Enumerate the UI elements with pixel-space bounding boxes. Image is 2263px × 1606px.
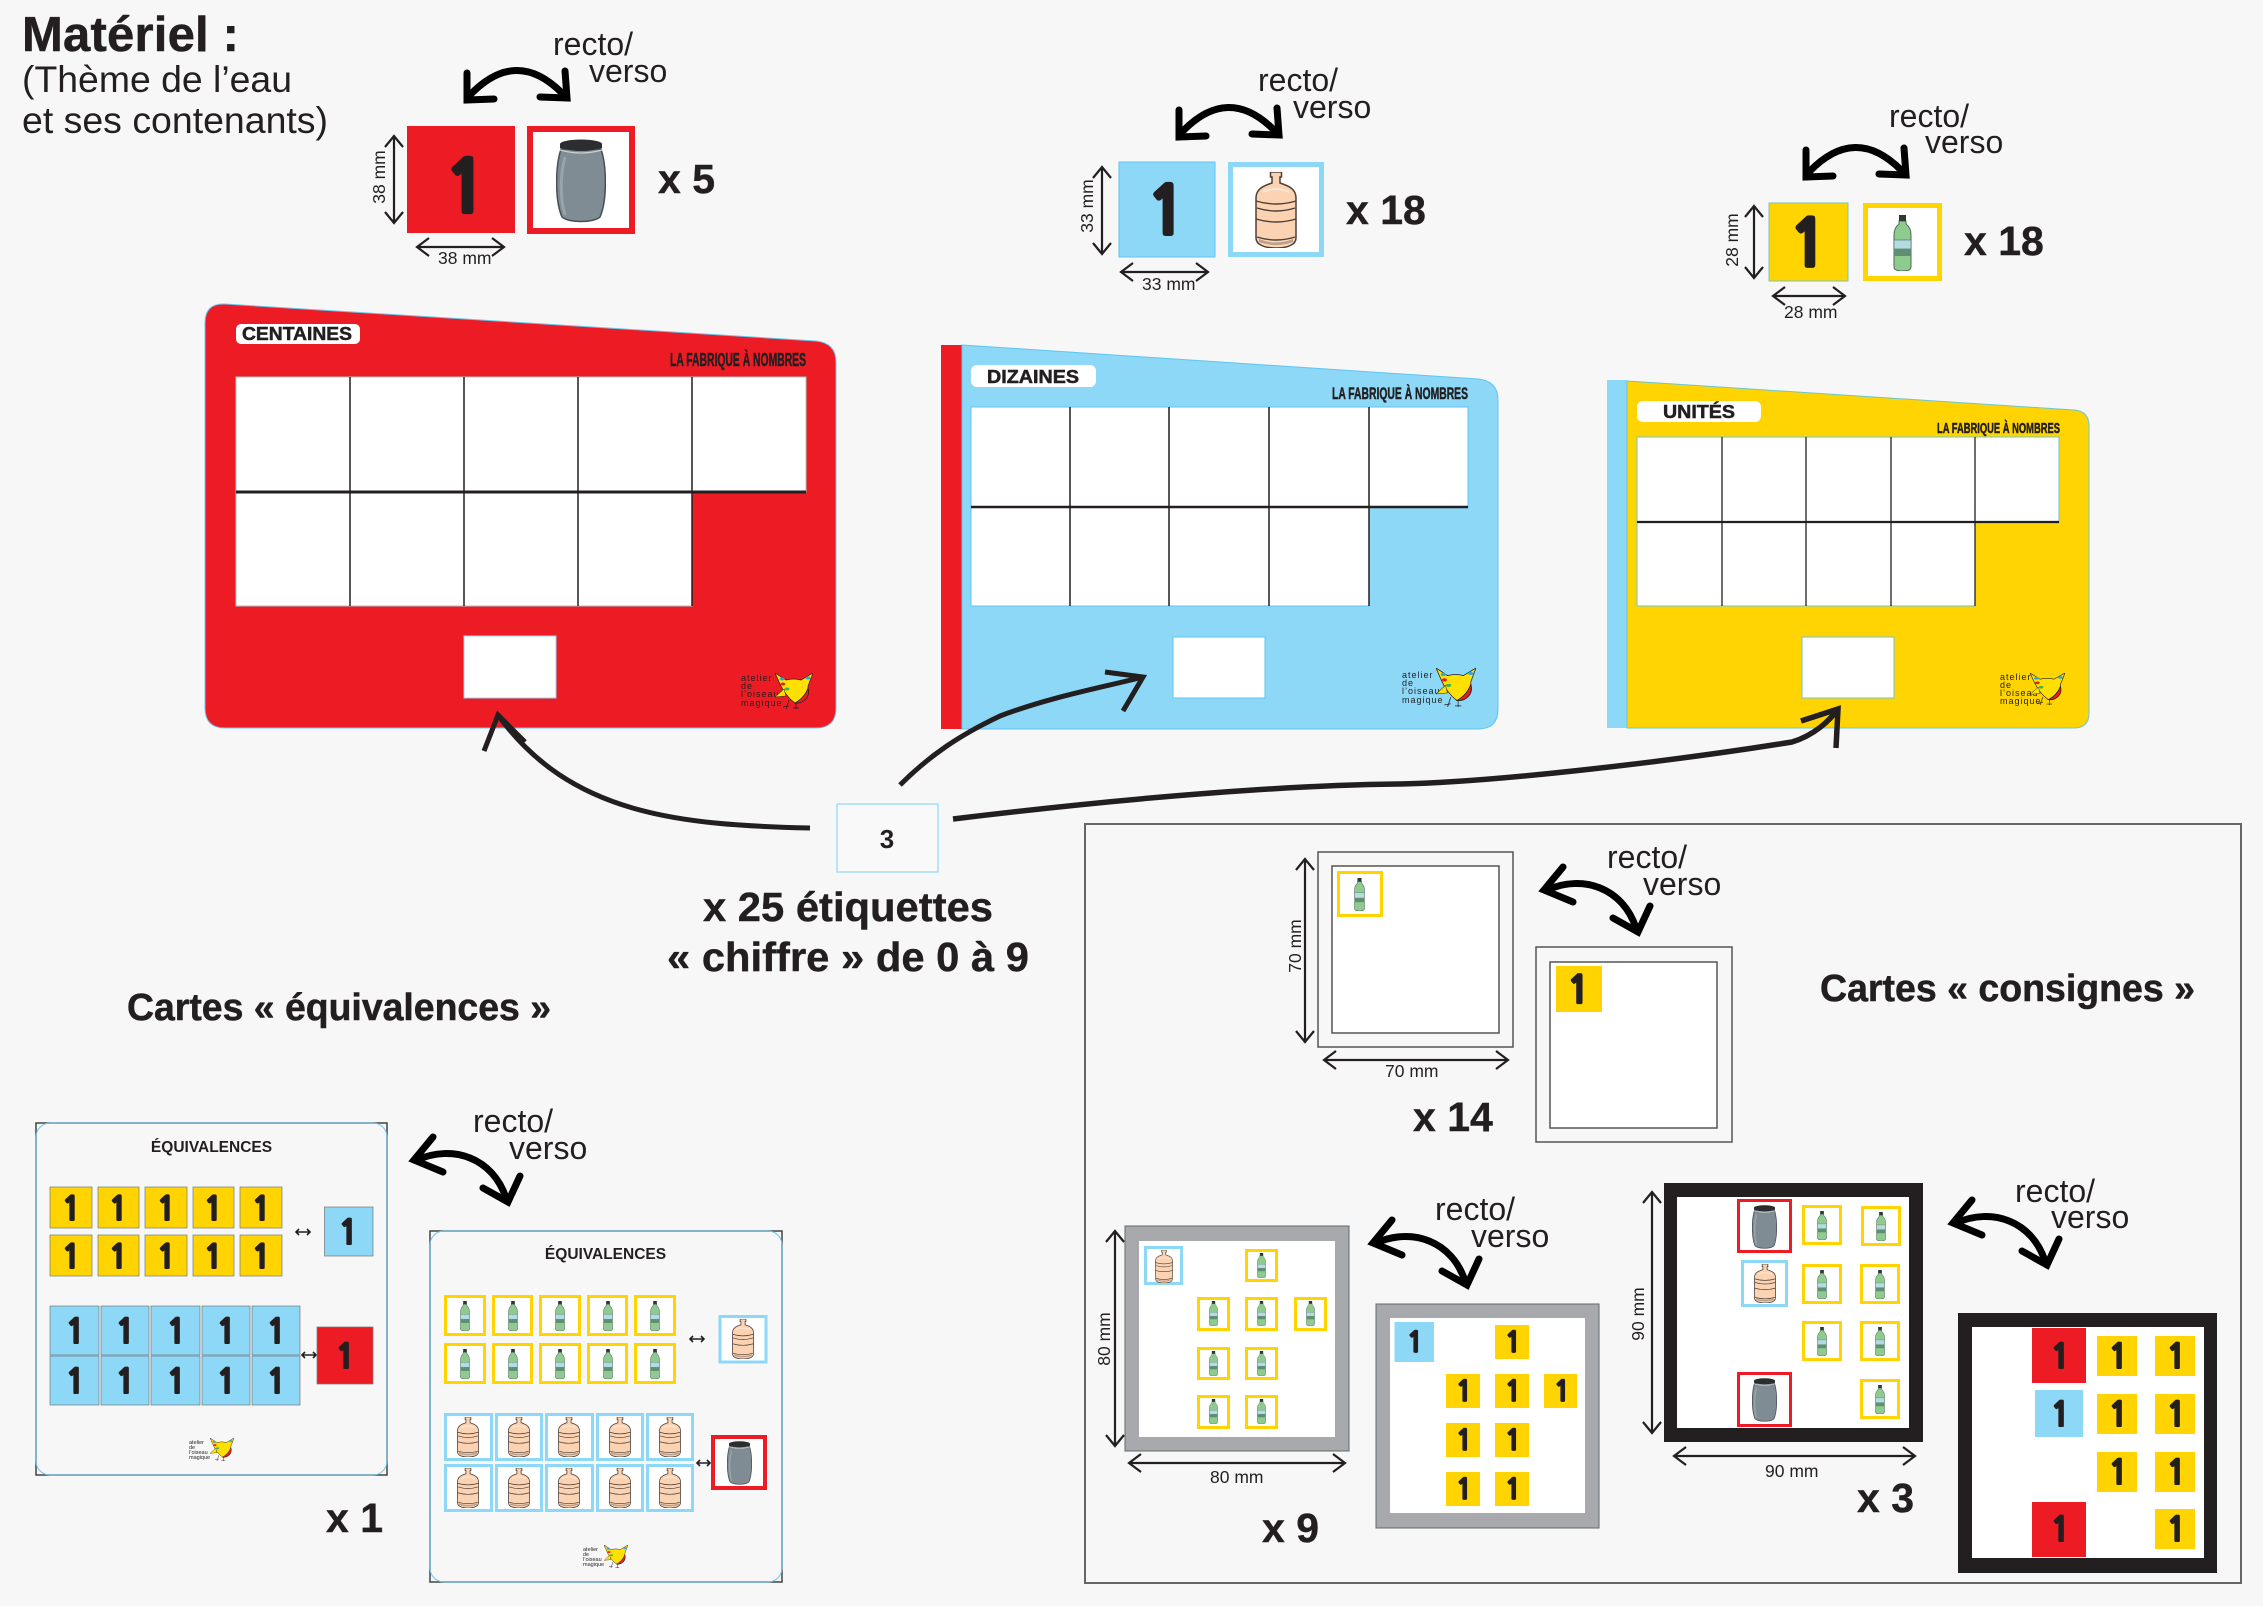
dimension: height — [1722, 206, 1763, 278]
logo: magique — [583, 1562, 604, 1568]
dimension: width — [1674, 1447, 1915, 1481]
ten blue card digits: 1 — [266, 1365, 286, 1398]
barrel single card — [713, 1437, 765, 1488]
card title: ÉQUIVALENCES — [545, 1246, 666, 1263]
quantity: x 14 — [1413, 1094, 1493, 1140]
jug single card — [720, 1316, 766, 1362]
verso card: 1 — [1567, 971, 1590, 1009]
card: equivalence recto — [36, 1123, 387, 1475]
quantity: x 18 — [1964, 218, 2044, 264]
arrow: label to dizaines — [900, 672, 1143, 785]
recto verso label: recto/ — [1607, 839, 1687, 875]
ten frame — [971, 407, 1468, 606]
group: 14 cards — [1285, 839, 1732, 1142]
ten yellow card digits: 1 — [204, 1241, 223, 1273]
digit label sample: 3 — [880, 824, 894, 854]
blue spine — [1607, 380, 1627, 728]
verso card: 1 — [1456, 1378, 1473, 1406]
panel: centaines board — [205, 304, 836, 728]
icon: flip arrow — [1373, 1220, 1479, 1285]
ten blue card digits: 1 — [65, 1315, 85, 1348]
verso card: 1 — [1407, 1329, 1424, 1357]
verso card — [1376, 1304, 1599, 1528]
red single card — [317, 1327, 373, 1384]
panel: cartes consignes — [1085, 824, 2241, 1583]
ten yellow card digits: 1 — [204, 1193, 223, 1225]
icon: flip arrow — [1953, 1200, 2059, 1265]
ten blue card digits: 1 — [216, 1315, 236, 1348]
recto card — [1318, 852, 1513, 1047]
dimension: width: 90 mm — [1765, 1461, 1818, 1481]
label: unites — [1637, 401, 1761, 422]
dimension: width — [1121, 263, 1208, 294]
digit box — [1802, 637, 1894, 698]
card: red recto — [407, 126, 515, 233]
subtitle: (Thème de l’eau — [22, 59, 292, 100]
board shape — [962, 345, 1498, 729]
caption: digit labels: x 25 étiquettes — [703, 884, 993, 930]
verso card: 1 — [2050, 1340, 2070, 1373]
verso card: 1 — [2050, 1513, 2070, 1546]
recto verso label: recto/ — [473, 1103, 553, 1139]
logo — [741, 673, 813, 709]
logo: magique — [1402, 695, 1444, 705]
dimension: width — [1773, 287, 1845, 322]
logo: atelier — [2000, 672, 2032, 682]
dimension: height: 33 mm — [1077, 179, 1097, 233]
ten yellow card digits: 1 — [62, 1241, 81, 1273]
card: equivalence verso — [430, 1231, 782, 1582]
group: unites cards — [1722, 98, 2044, 322]
subtitle — [22, 59, 328, 141]
title: Matériel : — [22, 8, 239, 62]
recto verso label: verso — [1643, 866, 1721, 902]
group: 9 cards — [1094, 1191, 1599, 1551]
dimension: width: 80 mm — [1210, 1467, 1263, 1487]
verso card: 1 — [1505, 1476, 1522, 1504]
quantity: x 9 — [1262, 1505, 1319, 1551]
label: dizaines: DIZAINES — [987, 367, 1079, 387]
verso card: 1 — [2108, 1340, 2128, 1373]
logo: atelier — [583, 1547, 598, 1553]
blue single card — [324, 1207, 373, 1256]
logo: magique — [189, 1455, 210, 1461]
icon: flip arrow — [414, 1137, 520, 1202]
heading: cartes consignes: Cartes « consignes » — [1820, 968, 2195, 1010]
logo: l’oiseau — [2000, 688, 2039, 698]
group: equivalence cards — [36, 1103, 782, 1582]
dimension: width: 38 mm — [438, 248, 491, 268]
red spine — [941, 345, 962, 729]
ten bottle cards — [446, 1296, 674, 1382]
recto verso label: verso — [1925, 124, 2003, 160]
logo: de — [1402, 678, 1414, 688]
heading: cartes equivalences: Cartes « équivalences » — [127, 987, 551, 1029]
ten blue card digits: 1 — [166, 1365, 186, 1398]
dimension: width — [1129, 1454, 1345, 1487]
verso card: 1 — [1554, 1378, 1571, 1406]
group: 3 cards — [1628, 1173, 2217, 1573]
verso card: 1 — [2166, 1456, 2186, 1489]
recto card — [1125, 1226, 1349, 1451]
quantity: x 5 — [658, 156, 715, 202]
verso card: 1 — [1505, 1427, 1522, 1455]
logo — [583, 1545, 628, 1568]
ten frame — [1637, 437, 2059, 606]
label: unites: UNITÉS — [1663, 401, 1735, 422]
board shape — [205, 304, 836, 728]
recto verso label — [2015, 1173, 2129, 1235]
verso card: 1 — [2166, 1340, 2186, 1373]
recto verso label: verso — [2051, 1199, 2129, 1235]
recto verso label: verso — [509, 1130, 587, 1166]
card: red recto: 1 — [444, 152, 487, 223]
board shape — [1627, 381, 2089, 728]
recto verso label: recto/ — [1258, 62, 1338, 98]
digit box — [464, 636, 556, 698]
logo: de — [741, 681, 753, 691]
caption: digit labels — [667, 884, 1029, 980]
dimension: height — [1077, 167, 1111, 254]
digit label sample — [837, 804, 938, 872]
recto verso label: recto/ — [553, 26, 633, 62]
ten yellow card digits: 1 — [62, 1193, 81, 1225]
dimension: height: 38 mm — [369, 150, 389, 204]
ten jug cards — [446, 1414, 692, 1510]
dimension: width — [1324, 1051, 1508, 1081]
recto verso label — [1607, 839, 1721, 902]
dimension: height — [1094, 1231, 1124, 1446]
verso card — [1536, 947, 1732, 1142]
ten blue card digits: 1 — [115, 1315, 135, 1348]
card: barrel verso — [530, 129, 632, 231]
logo: l’oiseau — [189, 1450, 208, 1456]
logo — [189, 1438, 234, 1461]
panel: unites board — [1607, 380, 2089, 728]
recto card — [1664, 1183, 1923, 1442]
logo: atelier — [189, 1440, 204, 1446]
dimension: width — [417, 238, 504, 268]
verso card: 1 — [2108, 1398, 2128, 1431]
quantity: x 1 — [326, 1495, 383, 1541]
icon: small arrow — [697, 1460, 710, 1466]
blue single card: 1 — [338, 1216, 358, 1249]
icon: flip arrow — [1544, 867, 1650, 932]
recto verso label: recto/ — [1435, 1191, 1515, 1227]
verso card — [1958, 1313, 2217, 1573]
dimension: width: 70 mm — [1385, 1061, 1438, 1081]
dimension: height: 28 mm — [1722, 213, 1742, 267]
ten yellow card digits: 1 — [109, 1193, 128, 1225]
card: yellow recto — [1769, 203, 1848, 281]
card: blue recto: 1 — [1147, 178, 1187, 244]
logo — [2000, 672, 2065, 706]
icon: flip arrow — [467, 70, 567, 100]
ten yellow card digits: 1 — [157, 1193, 176, 1225]
ten yellow card digits: 1 — [252, 1241, 271, 1273]
ten blue card digits: 1 — [266, 1315, 286, 1348]
ten blue card digits: 1 — [166, 1315, 186, 1348]
verso card: 1 — [2166, 1398, 2186, 1431]
recto verso label: verso — [589, 53, 667, 89]
dimension: height: 70 mm — [1285, 919, 1305, 973]
dimension: height — [1285, 859, 1314, 1042]
verso card: 1 — [2166, 1513, 2186, 1546]
recto verso label: verso — [1293, 89, 1371, 125]
quantity: x 3 — [1857, 1475, 1914, 1521]
icon: flip arrow — [1806, 147, 1906, 177]
dimension: height: 80 mm — [1094, 1312, 1114, 1366]
logo: l’oiseau — [741, 689, 780, 699]
verso card: 1 — [1456, 1427, 1473, 1455]
ten blue cards — [50, 1306, 300, 1405]
icon: small arrow — [296, 1229, 310, 1235]
ten yellow card digits: 1 — [157, 1241, 176, 1273]
logo: atelier — [741, 673, 773, 683]
dimension: width: 28 mm — [1784, 302, 1837, 322]
icon: small arrow — [302, 1352, 316, 1358]
card title: ÉQUIVALENCES — [151, 1139, 272, 1156]
arrow: label to centaines — [484, 715, 810, 828]
logo: magique — [2000, 696, 2042, 706]
brand title: LA FABRIQUE À NOMBRES — [1937, 420, 2060, 437]
recto verso label — [1889, 98, 2003, 160]
icon: small arrow — [690, 1336, 704, 1342]
recto verso label — [553, 26, 667, 89]
card: bottle verso — [1866, 206, 1940, 278]
digit box — [1173, 637, 1265, 698]
ten blue card digits: 1 — [65, 1365, 85, 1398]
logo: de — [189, 1445, 195, 1451]
recto verso label: recto/ — [2015, 1173, 2095, 1209]
recto verso label — [1435, 1191, 1549, 1254]
dimension: height: 90 mm — [1628, 1287, 1648, 1341]
verso card: 1 — [1456, 1476, 1473, 1504]
verso card: 1 — [1505, 1378, 1522, 1406]
dimension: height — [1628, 1192, 1661, 1433]
ten yellow card digits: 1 — [109, 1241, 128, 1273]
red single card: 1 — [335, 1340, 355, 1373]
logo — [1402, 668, 1476, 707]
brand title: LA FABRIQUE À NOMBRES — [670, 349, 806, 370]
verso card: 1 — [2108, 1456, 2128, 1489]
logo: de — [2000, 680, 2012, 690]
label: centaines: CENTAINES — [242, 323, 352, 344]
verso card: 1 — [1505, 1329, 1522, 1357]
panel: dizaines board — [941, 345, 1498, 729]
panel frame — [1085, 824, 2241, 1583]
ten blue card digits: 1 — [115, 1365, 135, 1398]
ten yellow card digits — [62, 1193, 271, 1273]
icon: flip arrow — [1179, 107, 1279, 137]
ten blue card digits: 1 — [216, 1365, 236, 1398]
subtitle: et ses contenants) — [22, 100, 328, 141]
logo: l’oiseau — [583, 1557, 602, 1563]
arrow: label to unites — [953, 709, 1838, 819]
verso card: 1 — [2050, 1398, 2070, 1431]
recto verso label — [473, 1103, 587, 1166]
ten yellow cards — [50, 1187, 282, 1276]
logo: de — [583, 1552, 589, 1558]
group: dizaines cards — [1077, 62, 1426, 294]
logo: atelier — [1402, 670, 1434, 680]
logo: l’oiseau — [1402, 686, 1441, 696]
quantity: x 18 — [1346, 187, 1426, 233]
recto verso label: recto/ — [1889, 98, 1969, 134]
brand title: LA FABRIQUE À NOMBRES — [1332, 384, 1468, 403]
recto verso label — [1258, 62, 1371, 125]
ten frame — [236, 377, 806, 606]
logo: magique — [741, 698, 783, 708]
label: dizaines — [971, 365, 1096, 387]
card: yellow recto: 1 — [1789, 212, 1828, 276]
ten blue card digits — [65, 1315, 286, 1398]
ten yellow card digits: 1 — [252, 1193, 271, 1225]
card: blue recto — [1119, 162, 1215, 257]
dimension: height — [369, 136, 403, 223]
recto verso label: verso — [1471, 1218, 1549, 1254]
caption: digit labels: « chiffre » de 0 à 9 — [667, 934, 1029, 980]
dimension: width: 33 mm — [1142, 274, 1195, 294]
group: centaines cards — [369, 26, 715, 268]
card: jug verso — [1230, 164, 1322, 254]
